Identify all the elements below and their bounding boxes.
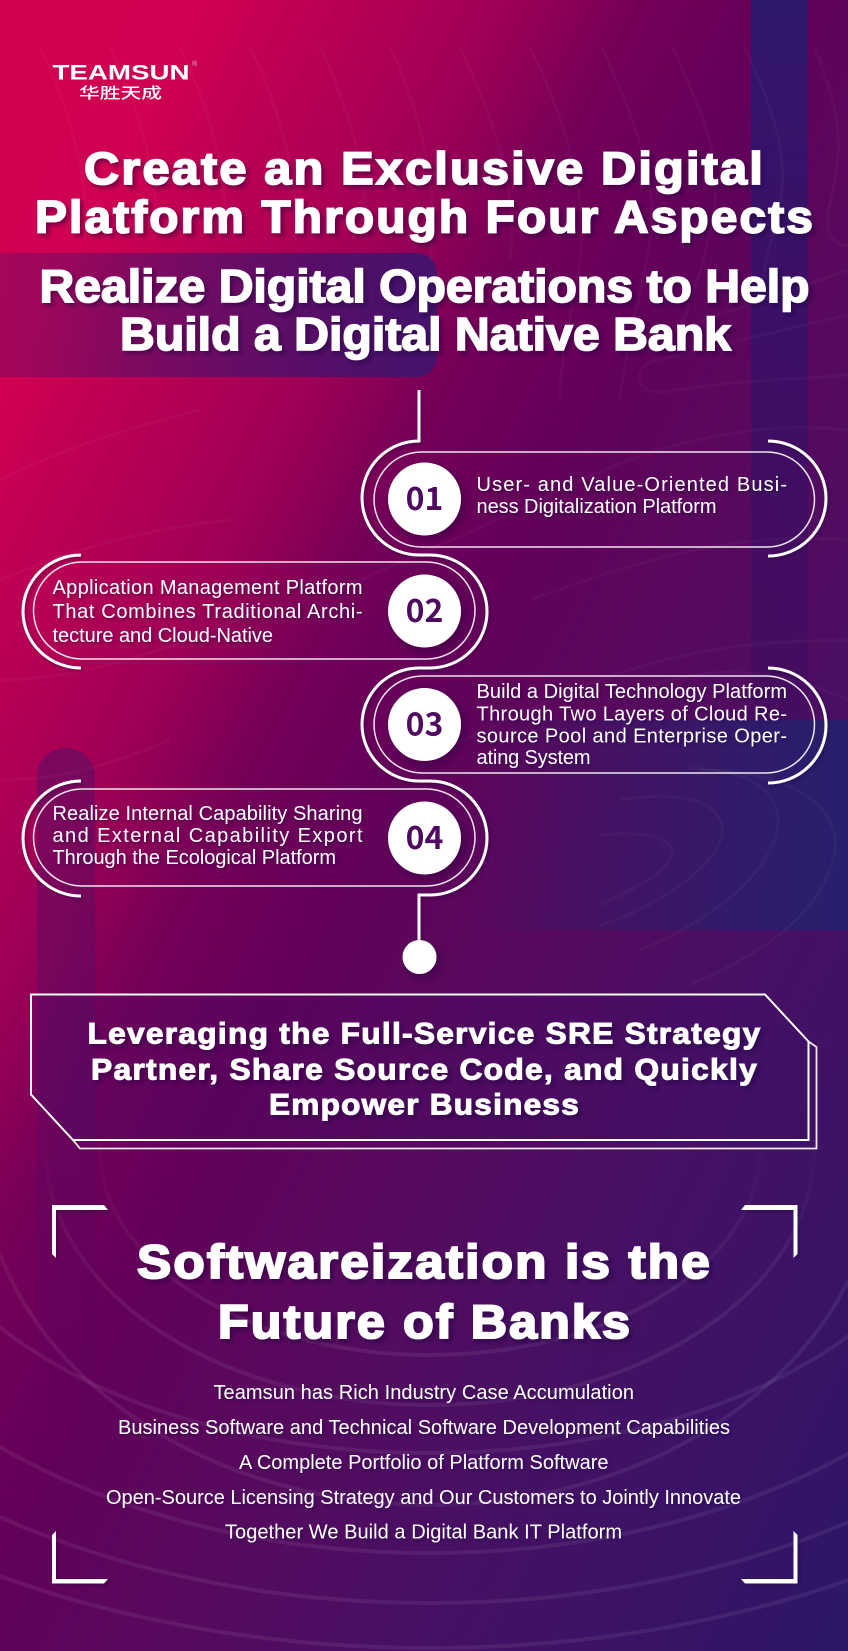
heading: softwareization — [137, 1235, 712, 1348]
step 03: source Pool and Enterprise Oper- — [476, 726, 787, 748]
logo: Teamsun: TEAMSUN — [52, 62, 190, 84]
background shape: lower right block — [468, 720, 848, 930]
background shape: left vertical bar — [37, 748, 95, 1420]
background shape: right vertical band — [751, 0, 808, 757]
text block: closing statements: A Complete Portfolio of Platform Software — [239, 1452, 608, 1474]
text block: closing statements: Business Software and Technical Software Development Capabilities — [118, 1417, 730, 1439]
callout: SRE strategy box: Leveraging the Full-Service SRE Strategy — [88, 1018, 762, 1050]
background contour lines: top — [0, 47, 848, 780]
callout: SRE strategy box: Empower Business — [269, 1088, 580, 1122]
step 01 — [374, 441, 826, 556]
step 02: Application Management Platform — [52, 577, 362, 599]
subtitle: Build a Digital Native Bank — [120, 308, 731, 360]
step 03: 03 — [406, 700, 443, 746]
heading: softwareization: Softwareization is the — [137, 1235, 712, 1288]
background shape: heading panel — [0, 253, 437, 377]
subtitle: Realize Digital Operations to Help — [40, 260, 810, 312]
background contour lines: lower right — [600, 768, 835, 985]
logo: Teamsun: ® — [192, 60, 198, 68]
step 03: Build a Digital Technology Platform — [476, 681, 787, 703]
heading: softwareization: Future of Banks — [218, 1295, 632, 1348]
logo: Teamsun: 华胜天成 — [79, 82, 162, 103]
title: Platform Through Four Aspects — [35, 192, 815, 242]
step 02: tecture and Cloud-Native — [52, 625, 273, 647]
step 04: and External Capability Export — [52, 825, 363, 847]
step 03: Through Two Layers of Cloud Re- — [476, 704, 787, 726]
step 04 — [23, 781, 475, 896]
flow end dot — [402, 940, 436, 974]
step 02: 02 — [406, 586, 443, 632]
text block: closing statements: Teamsun has Rich Industry Case Accumulation — [214, 1382, 634, 1404]
title: Create an Exclusive Digital — [84, 143, 765, 194]
corner brackets — [52, 1205, 798, 1584]
step 04: Through the Ecological Platform — [52, 847, 336, 869]
step 01: ness Digitalization Platform — [476, 496, 716, 518]
background contour lines: concentric rings — [0, 1205, 848, 1650]
step 04: Realize Internal Capability Sharing — [52, 803, 362, 825]
step 01: User- and Value-Oriented Busi- — [476, 474, 787, 496]
subtitle — [40, 260, 810, 360]
step 04: 04 — [406, 813, 443, 859]
step 03: ating System — [476, 747, 590, 769]
logo: Teamsun — [52, 60, 198, 103]
text block: closing statements — [106, 1382, 741, 1544]
callout: SRE strategy box — [31, 994, 816, 1148]
step 01: 01 — [406, 474, 443, 520]
step 03 — [374, 668, 826, 783]
step 02 — [23, 555, 475, 668]
text block: closing statements: Open-Source Licensing Strategy and Our Customers to Jointly Innovate — [106, 1487, 741, 1509]
flow connector: outer serpentine line — [362, 390, 487, 945]
text block: closing statements: Together We Build a Digital Bank IT Platform — [225, 1522, 622, 1544]
step 02: That Combines Traditional Archi- — [52, 601, 362, 623]
callout: SRE strategy box: Partner, Share Source Code, and Quickly — [91, 1054, 758, 1086]
title — [35, 143, 815, 242]
